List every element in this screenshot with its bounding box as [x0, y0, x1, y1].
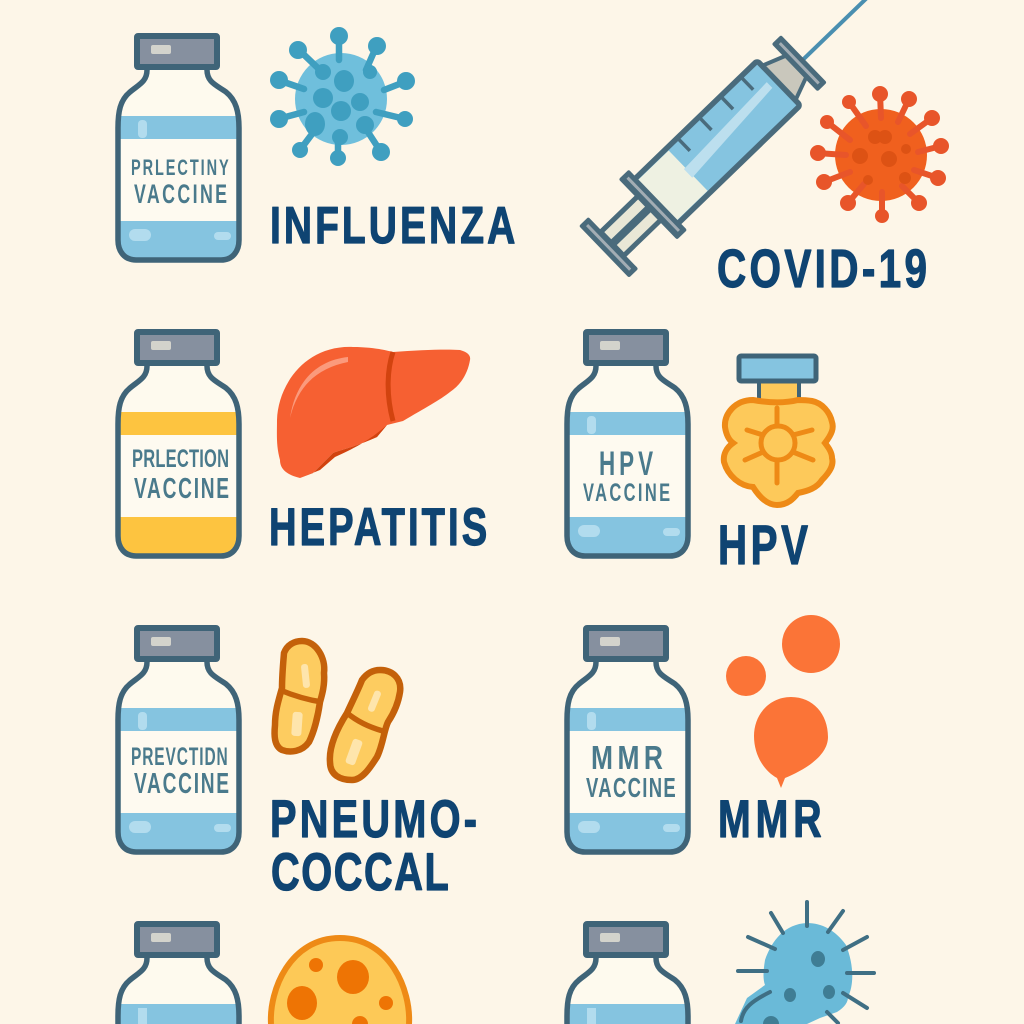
label: hepatitis: HEPATITIS [269, 497, 487, 556]
vial: fourth row left [118, 924, 239, 1024]
label: pneumococcal [270, 789, 477, 901]
label: mmr: MMR [718, 789, 822, 848]
label: covid-19: COVID-19 [717, 239, 927, 299]
vial: influenza [116, 36, 242, 262]
icon: mmr particles [726, 615, 840, 788]
vial: hpv: VACCINE [583, 480, 670, 507]
label: influenza: INFLUENZA [270, 195, 515, 254]
vial: influenza: PRLECTINY [131, 155, 229, 180]
vial: mmr: MMR [591, 740, 663, 777]
icon: blue bacterium [735, 902, 874, 1024]
label: hpv: HPV [718, 515, 808, 577]
icon: syringe [575, 0, 899, 282]
vial: pneumococcal [116, 628, 242, 854]
icon: blue virus [270, 27, 415, 166]
vial: influenza: VACCINE [134, 178, 227, 209]
vial: hepatitis: VACCINE [134, 473, 229, 505]
icon: hpv virus [724, 356, 833, 505]
icon: pneumococcus [275, 641, 400, 780]
label: pneumococcal: PNEUMO- [270, 789, 477, 848]
vial: fourth row right [567, 924, 688, 1024]
vial: hepatitis [116, 332, 242, 558]
vial: mmr: VACCINE [586, 773, 676, 804]
vial: pneumococcal: VACCINE [134, 768, 229, 800]
vial: mmr [565, 628, 691, 854]
icon: yellow cell [271, 938, 409, 1024]
vial: hpv [565, 332, 691, 558]
vial: hpv: HPV [599, 445, 654, 483]
icon: liver [277, 347, 470, 478]
vial: hepatitis: PRLECTION [132, 446, 229, 473]
label: pneumococcal: COCCAL [271, 842, 449, 901]
vial: pneumococcal: PREVCTIDN [131, 743, 228, 771]
icon: red virus [810, 86, 949, 223]
